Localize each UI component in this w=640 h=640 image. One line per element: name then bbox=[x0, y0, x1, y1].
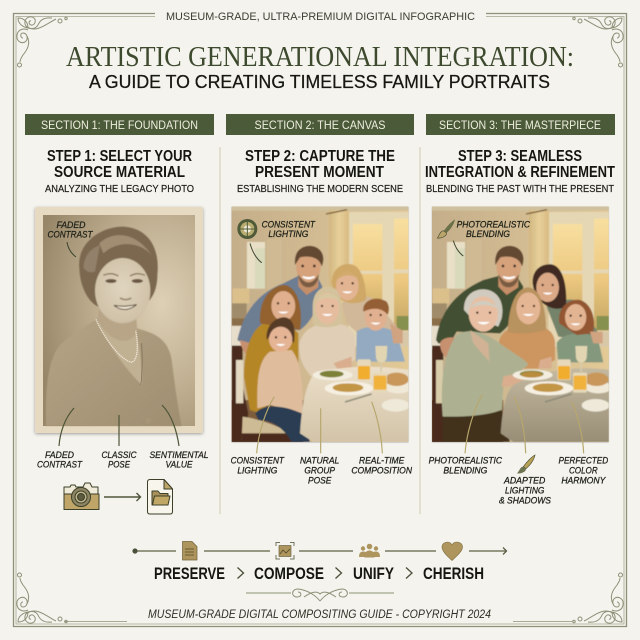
step 2 heading: ESTABLISHING THE MODERN SCENE bbox=[237, 183, 403, 195]
table bbox=[300, 367, 410, 442]
step 3 heading bbox=[425, 148, 615, 195]
callout labels: portrait: POSE bbox=[108, 460, 131, 470]
callout lines and labels: photo 2: NATURAL bbox=[300, 456, 339, 466]
step 3 heading: BLENDING THE PAST WITH THE PRESENT bbox=[426, 183, 615, 195]
callout lines and labels: photo 3 bbox=[429, 394, 609, 506]
callout lines and labels: photo 3: COLOR bbox=[569, 466, 598, 476]
mustard woman bbox=[244, 323, 298, 413]
step 1 heading: ANALYZING THE LEGACY PHOTO bbox=[45, 183, 194, 195]
panel: section 2 bbox=[226, 114, 414, 486]
girl bbox=[257, 350, 303, 413]
callout lines and labels: photo 3: PHOTOREALISTIC bbox=[429, 456, 502, 466]
table bbox=[501, 368, 610, 442]
section 3 banner bbox=[426, 114, 615, 135]
callout lines and labels: photo 2: GROUP bbox=[304, 466, 335, 476]
callout lines and labels: photo 3: LIGHTING bbox=[505, 486, 544, 496]
callout lines and labels: photo 2 bbox=[231, 397, 412, 486]
callout lines and labels: photo 3: PERFECTED bbox=[558, 456, 609, 466]
section 2 banner bbox=[226, 114, 414, 135]
grandmother bbox=[299, 324, 355, 378]
callout lines and labels: photo 2: REAL-TIME bbox=[359, 456, 405, 466]
panel: section 3 bbox=[425, 114, 615, 506]
section 1 banner: SECTION 1: THE FOUNDATION bbox=[41, 118, 198, 132]
icon: light dial bbox=[237, 219, 257, 239]
step 1 heading bbox=[45, 148, 194, 195]
section 3 banner: SECTION 3: THE MASTERPIECE bbox=[439, 118, 601, 132]
grandmother bbox=[442, 331, 528, 418]
back blonde woman bbox=[342, 296, 402, 343]
flow labels bbox=[154, 565, 484, 583]
step 3 heading: STEP 3: SEAMLESS bbox=[458, 148, 582, 165]
callout: consistent lighting: LIGHTING bbox=[268, 229, 308, 239]
step 2 heading bbox=[237, 148, 403, 195]
icon: document bbox=[182, 542, 197, 560]
arrow: camera to file bbox=[104, 493, 140, 501]
process flow bbox=[132, 542, 506, 583]
footer text: MUSEUM-GRADE DIGITAL COMPOSITING GUIDE - COPYRIGHT 2024 bbox=[148, 609, 491, 621]
modern family photo bbox=[230, 205, 412, 444]
callout labels: portrait: VALUE bbox=[166, 460, 193, 470]
section 1 banner bbox=[25, 114, 214, 135]
callout lines and labels: photo 2: CONSISTENT bbox=[231, 456, 285, 466]
flow labels: UNIFY bbox=[353, 565, 394, 583]
callout: consistent lighting: CONSISTENT bbox=[262, 219, 316, 229]
step 1 heading: STEP 1: SELECT YOUR bbox=[47, 148, 192, 165]
panel: section 1 bbox=[25, 114, 214, 514]
callout labels: portrait bbox=[37, 450, 208, 470]
icon: file with folder bbox=[148, 480, 172, 514]
title bbox=[66, 41, 574, 92]
girl bbox=[557, 333, 603, 362]
callout: photorealistic blending bbox=[437, 219, 530, 256]
hand bbox=[440, 337, 462, 358]
callout lines and labels: photo 2: COMPOSITION bbox=[351, 466, 412, 476]
frame banner text: MUSEUM-GRADE, ULTRA-PREMIUM DIGITAL INFOGRAPHIC bbox=[166, 11, 475, 23]
icon: people bbox=[359, 544, 380, 558]
chair bbox=[232, 346, 248, 442]
callout lines and labels: photo 3: & SHADOWS bbox=[499, 496, 551, 506]
section 2 banner: SECTION 2: THE CANVAS bbox=[254, 118, 386, 132]
step 2 heading: PRESENT MOMENT bbox=[255, 164, 384, 181]
back dark woman bbox=[547, 300, 602, 343]
callout lines: portrait bbox=[59, 405, 179, 446]
back man bbox=[237, 275, 322, 347]
back man bbox=[436, 276, 523, 343]
icon: image frame bbox=[276, 542, 294, 559]
icon: heart bbox=[442, 542, 462, 560]
callout labels: portrait: SENTIMENTAL bbox=[150, 450, 208, 460]
flow labels: COMPOSE bbox=[254, 565, 324, 583]
callout lines and labels: photo 3: HARMONY bbox=[561, 476, 606, 486]
callout: faded contrast bbox=[48, 220, 94, 257]
icon: camera bbox=[64, 483, 99, 510]
callout lines and labels: photo 3: ADAPTED bbox=[503, 476, 546, 486]
flow connector line bbox=[132, 548, 506, 554]
callout labels: portrait: FADED bbox=[45, 450, 74, 460]
callout labels: portrait: CONTRAST bbox=[37, 460, 83, 470]
flow labels: PRESERVE bbox=[154, 565, 225, 583]
boy bbox=[356, 327, 405, 362]
flow labels: CHERISH bbox=[423, 565, 484, 583]
chair bbox=[432, 346, 447, 442]
ornamental divider bbox=[246, 589, 394, 601]
callout: faded contrast: FADED bbox=[56, 220, 86, 230]
integrated family photo bbox=[430, 205, 612, 444]
callout: faded contrast: CONTRAST bbox=[48, 230, 94, 240]
callout: consistent lighting bbox=[237, 219, 316, 263]
callout: photorealistic blending: BLENDING bbox=[466, 229, 510, 239]
vintage portrait photo bbox=[35, 207, 203, 433]
title: ARTISTIC GENERATIONAL INTEGRATION: bbox=[66, 41, 574, 73]
icon: brush small bbox=[517, 455, 535, 473]
title: A GUIDE TO CREATING TIMELESS FAMILY PORTRAITS bbox=[89, 72, 550, 92]
column dividers bbox=[220, 147, 420, 514]
callout: photorealistic blending: PHOTOREALISTIC bbox=[457, 219, 530, 229]
callout lines and labels: photo 3: BLENDING bbox=[443, 466, 487, 476]
step 1 heading: SOURCE MATERIAL bbox=[54, 164, 185, 181]
icon: brush bbox=[437, 219, 455, 238]
callout lines and labels: photo 2: POSE bbox=[308, 476, 332, 486]
middle woman bbox=[499, 326, 555, 368]
step 2 heading: STEP 2: CAPTURE THE bbox=[245, 148, 395, 165]
callout labels: portrait: CLASSIC bbox=[102, 450, 137, 460]
callout lines and labels: photo 2: LIGHTING bbox=[237, 466, 277, 476]
